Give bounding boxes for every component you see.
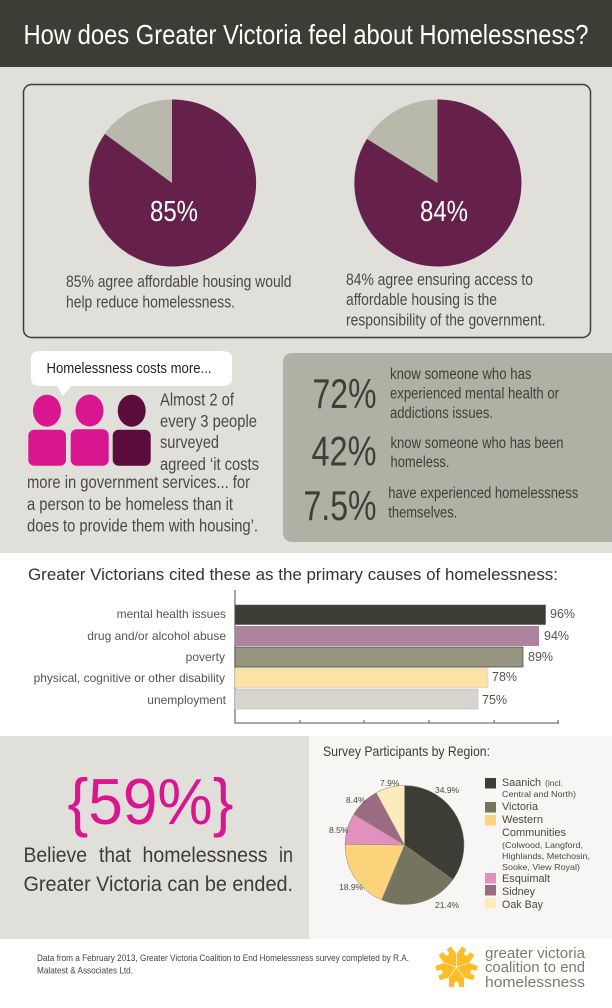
bar chart: primary causes (34, 590, 575, 723)
bar chart: primary causes: 75% (482, 693, 507, 707)
stat: 7.5%: 7.5% (304, 482, 376, 529)
text: costs more paragraph: Almost 2 of (160, 390, 234, 410)
bar chart: primary causes: physical, cognitive or other disability (34, 671, 225, 685)
text: 85% caption: help reduce homelessness. (66, 292, 235, 312)
bar chart: primary causes: 89% (528, 650, 553, 664)
text: costs more paragraph: every 3 people (160, 411, 257, 431)
stat: 72% (312, 366, 559, 422)
panel: 59% believe homelessness can be ended: in (279, 844, 293, 867)
heading: causes of homelessness: Greater Victorians cited these as the primary causes of homelessness: (28, 565, 558, 584)
legend: Saanich (502, 777, 541, 789)
legend: Oak Bay (502, 899, 543, 911)
logo wordmark: greater victoria (485, 946, 586, 962)
title banner (0, 0, 612, 67)
panel: 59% believe homelessness can be ended: {59%} (68, 765, 234, 838)
bar chart: primary causes: 94% (544, 629, 569, 643)
text: 84% caption: 84% agree ensuring access to (346, 270, 533, 289)
panel: 59% believe homelessness can be ended: Believe (24, 844, 87, 867)
pie chart: 84%: 84% (420, 196, 468, 228)
pie labels: 21.4% (435, 900, 460, 910)
stat: 7.5%: themselves. (388, 504, 457, 522)
panel: 59% believe homelessness can be ended: Greater Victoria can be ended. (24, 873, 293, 896)
legend: Central and North) (502, 789, 576, 799)
legend: (Colwood, Langford, (502, 840, 583, 850)
stat: 7.5% (304, 482, 579, 529)
stat: 42%: 42% (312, 428, 376, 474)
pie labels: 7.9% (380, 778, 400, 788)
stat: 72%: 72% (312, 370, 376, 417)
legend (485, 777, 590, 911)
bar chart: primary causes: drug and/or alcohol abuse (87, 629, 226, 643)
bar chart: primary causes: mental health issues (117, 607, 226, 621)
pie chart: 85%: 85% (150, 196, 198, 228)
text: costs more paragraph (27, 390, 259, 536)
text: 84% caption: affordable housing is the (346, 290, 497, 309)
text: 85% caption (66, 272, 292, 312)
panel: 59% believe homelessness can be ended: that (99, 844, 131, 867)
pie labels: 8.4% (346, 795, 366, 805)
panel: 59% believe homelessness can be ended: homelessness (142, 844, 268, 867)
legend: Highlands, Metchosin, (502, 851, 590, 861)
pie chart: 85% (88, 99, 256, 266)
stat: 7.5%: have experienced homelessness (388, 485, 579, 502)
panel: agreement pie charts (24, 84, 590, 338)
stat: 42%: homeless. (390, 454, 450, 471)
stat: 72%: know someone who has (390, 366, 532, 383)
logo wordmark: coalition to end (485, 960, 585, 976)
legend: Esquimalt (502, 873, 550, 885)
icon: three people (28, 394, 151, 466)
stat: 42%: know someone who has been (390, 435, 564, 452)
pie labels: 18.9% (339, 882, 364, 892)
footer source note: Malatest & Associates Ltd. (37, 966, 133, 976)
text: costs more paragraph: a person to be homeless than it (27, 494, 233, 514)
panel: survey participants by region (309, 736, 612, 939)
text: 84% caption (346, 270, 546, 330)
callout: homelessness costs more: Homelessness costs more... (46, 360, 212, 377)
logo wordmark (485, 946, 586, 991)
footer source note (37, 953, 409, 976)
stat: 72%: addictions issues. (390, 405, 493, 422)
logo wordmark: homelessness (485, 975, 585, 991)
bar chart: primary causes: unemployment (147, 693, 227, 707)
text: costs more paragraph: agreed ‘it costs (160, 454, 259, 474)
text: costs more paragraph: does to provide them with housing’. (27, 516, 258, 536)
pie labels: 34.9% (435, 785, 460, 795)
legend: Communities (502, 827, 566, 839)
panel: 59% believe homelessness can be ended (0, 736, 309, 939)
pie labels (329, 778, 460, 910)
text: costs more paragraph: more in government services... for (27, 472, 250, 492)
text: 84% caption: responsibility of the government. (346, 310, 546, 330)
bar chart: primary causes: 78% (492, 670, 517, 684)
panel: survey participants by region: Survey Participants by Region: (323, 743, 490, 759)
stat: 72%: experienced mental health or (390, 386, 559, 402)
pie chart: regions (345, 786, 464, 905)
bar chart: primary causes: poverty (186, 650, 225, 664)
legend: Victoria (502, 801, 539, 813)
panel: personal experience statistics (283, 353, 612, 542)
legend: Western (502, 814, 543, 826)
legend: (incl. (545, 778, 563, 788)
legend: Sooke, View Royal) (502, 862, 580, 872)
footer source note: Data from a February 2013, Greater Victoria Coalition to End Homelessness survey completed by R.A. (37, 953, 409, 964)
legend: Sidney (502, 886, 535, 898)
pie labels: 8.5% (329, 825, 349, 835)
text: costs more paragraph: surveyed (160, 432, 219, 452)
text: 85% caption: 85% agree affordable housing would (66, 272, 292, 291)
stat: 42% (312, 428, 564, 474)
callout: homelessness costs more (31, 351, 232, 396)
pie chart: 84% (354, 99, 521, 267)
bar chart: primary causes: 96% (550, 607, 575, 621)
icon: coalition logo star (435, 946, 478, 987)
